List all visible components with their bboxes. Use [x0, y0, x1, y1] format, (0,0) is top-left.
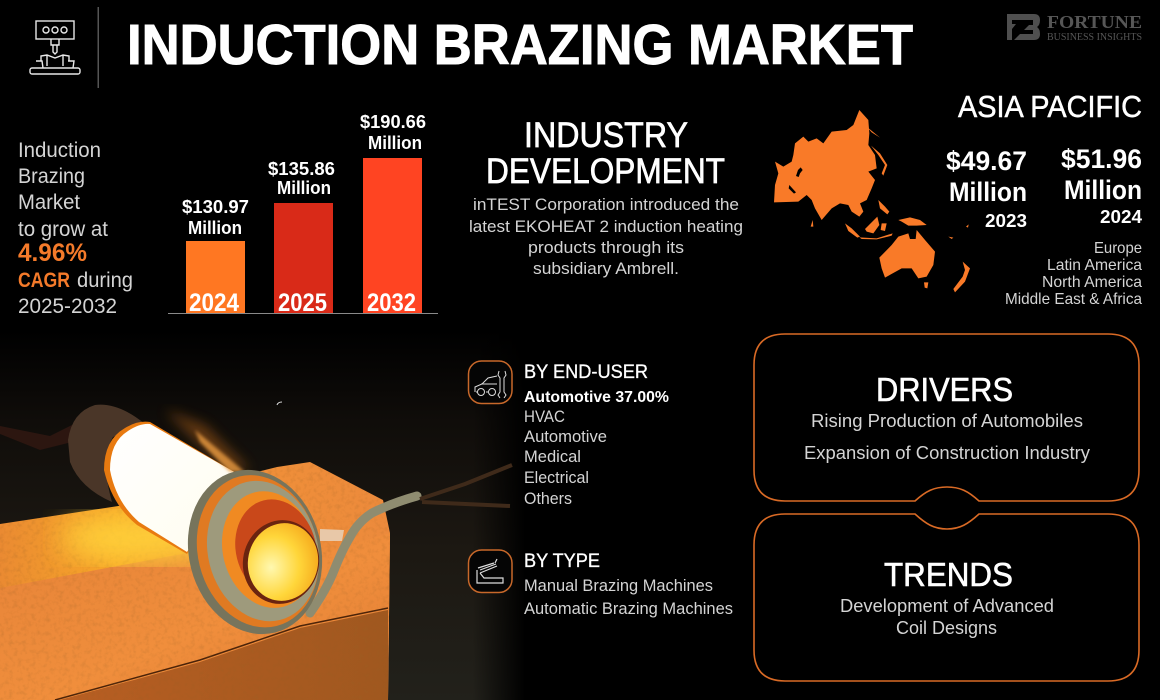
map: Asia Pacific	[774, 110, 970, 292]
other regions list: Middle East & Africa	[1005, 291, 1142, 308]
regional figures: Asia Pacific: $49.67	[946, 146, 1027, 176]
segment: by type: Manual Brazing Machines	[524, 576, 713, 595]
segment: by end-user	[524, 362, 669, 508]
segment: by end-user: Medical	[524, 447, 581, 466]
text block: market growth: during	[77, 269, 133, 292]
text block: market growth: to grow at	[18, 218, 108, 241]
icon: brazing bench	[468, 550, 512, 592]
other regions list	[1005, 240, 1142, 308]
text block: market growth	[18, 139, 133, 318]
spark	[277, 402, 282, 405]
segment: by end-user: HVAC	[524, 407, 565, 426]
flame glow	[165, 410, 250, 470]
bar 2025: $135.86	[268, 159, 335, 179]
bar 2032	[360, 112, 426, 317]
logo: Fortune Business Insights	[1007, 12, 1142, 43]
industry development: DEVELOPMENT	[486, 152, 725, 191]
title: INDUCTION BRAZING MARKET	[127, 13, 913, 77]
bar 2025: 2025	[278, 289, 327, 317]
industry development: latest EKOHEAT 2 induction heating	[469, 217, 743, 236]
segment: by end-user: Automotive	[524, 427, 607, 446]
dark wire behind tube	[0, 425, 72, 450]
text block: market growth: CAGR	[18, 269, 70, 292]
flame	[195, 430, 245, 472]
industry development	[469, 116, 743, 278]
text block: market growth: 4.96%	[18, 239, 87, 267]
regional figures: Asia Pacific: $51.96	[1061, 144, 1142, 174]
other regions list: Latin America	[1047, 257, 1142, 274]
other regions list: North America	[1042, 274, 1142, 291]
panel: trends: Coil Designs	[896, 618, 997, 638]
bar 2025	[268, 159, 335, 317]
regional figures: Asia Pacific: Million	[949, 177, 1027, 207]
industry development: subsidiary Ambrell.	[533, 259, 679, 278]
photo: induction coil heating a tube on a brick	[0, 377, 513, 700]
panel: drivers: Expansion of Construction Industry	[804, 443, 1090, 463]
industry development: INDUSTRY	[524, 116, 688, 155]
segment: by end-user: Electrical	[524, 468, 589, 487]
coil opening	[235, 513, 327, 611]
segment: by type: Automatic Brazing Machines	[524, 599, 733, 618]
regional figures: Asia Pacific: Million	[1064, 175, 1142, 205]
lead wire	[310, 496, 417, 613]
segment: by type	[524, 551, 733, 618]
text block: market growth: Induction	[18, 139, 101, 162]
coil	[171, 455, 339, 649]
text block: market growth: Brazing	[18, 165, 85, 188]
header divider	[98, 7, 99, 88]
bar chart: market size	[168, 112, 438, 317]
bar 2032: Million	[368, 133, 422, 153]
other regions list: Europe	[1094, 240, 1142, 257]
bar 2024: $130.97	[182, 197, 249, 217]
header icon: brazing machine	[30, 21, 80, 74]
panel: trends	[754, 514, 1139, 681]
industry development: inTEST Corporation introduced the	[473, 195, 739, 214]
segment: by type: BY TYPE	[524, 551, 600, 572]
logo: Fortune Business Insights: FORTUNE	[1047, 12, 1142, 32]
segment: by end-user: Others	[524, 489, 572, 508]
segment: by end-user: Automotive 37.00%	[524, 389, 669, 406]
text block: market growth: 2025-2032	[18, 295, 117, 318]
industry development: products through its	[528, 238, 684, 257]
bar 2024: 2024	[189, 289, 239, 317]
bar 2032: 2032	[367, 289, 416, 317]
panel: trends: Development of Advanced	[840, 596, 1054, 616]
panel: drivers	[754, 334, 1139, 501]
bar 2032: $190.66	[360, 112, 426, 132]
text block: market growth: Market	[18, 191, 80, 214]
panel: trends: TRENDS	[884, 556, 1013, 593]
bar 2025: Million	[277, 178, 331, 198]
brick	[0, 462, 390, 700]
panel: drivers: Rising Production of Automobiles	[811, 411, 1083, 431]
regional figures: Asia Pacific: 2024	[1100, 207, 1142, 227]
logo: Fortune Business Insights: BUSINESS INSIGHTS	[1047, 32, 1142, 43]
bar 2024	[182, 197, 249, 317]
segment: by end-user: BY END-USER	[524, 362, 648, 383]
panel: drivers: DRIVERS	[876, 371, 1013, 408]
icon: car and wrench	[468, 361, 512, 404]
regional figures: Asia Pacific	[946, 89, 1142, 231]
regional figures: Asia Pacific: ASIA PACIFIC	[958, 89, 1142, 124]
sleeve	[68, 405, 145, 502]
bar 2024: Million	[188, 218, 242, 238]
regional figures: Asia Pacific: 2023	[985, 211, 1027, 231]
hot tube	[104, 422, 236, 554]
